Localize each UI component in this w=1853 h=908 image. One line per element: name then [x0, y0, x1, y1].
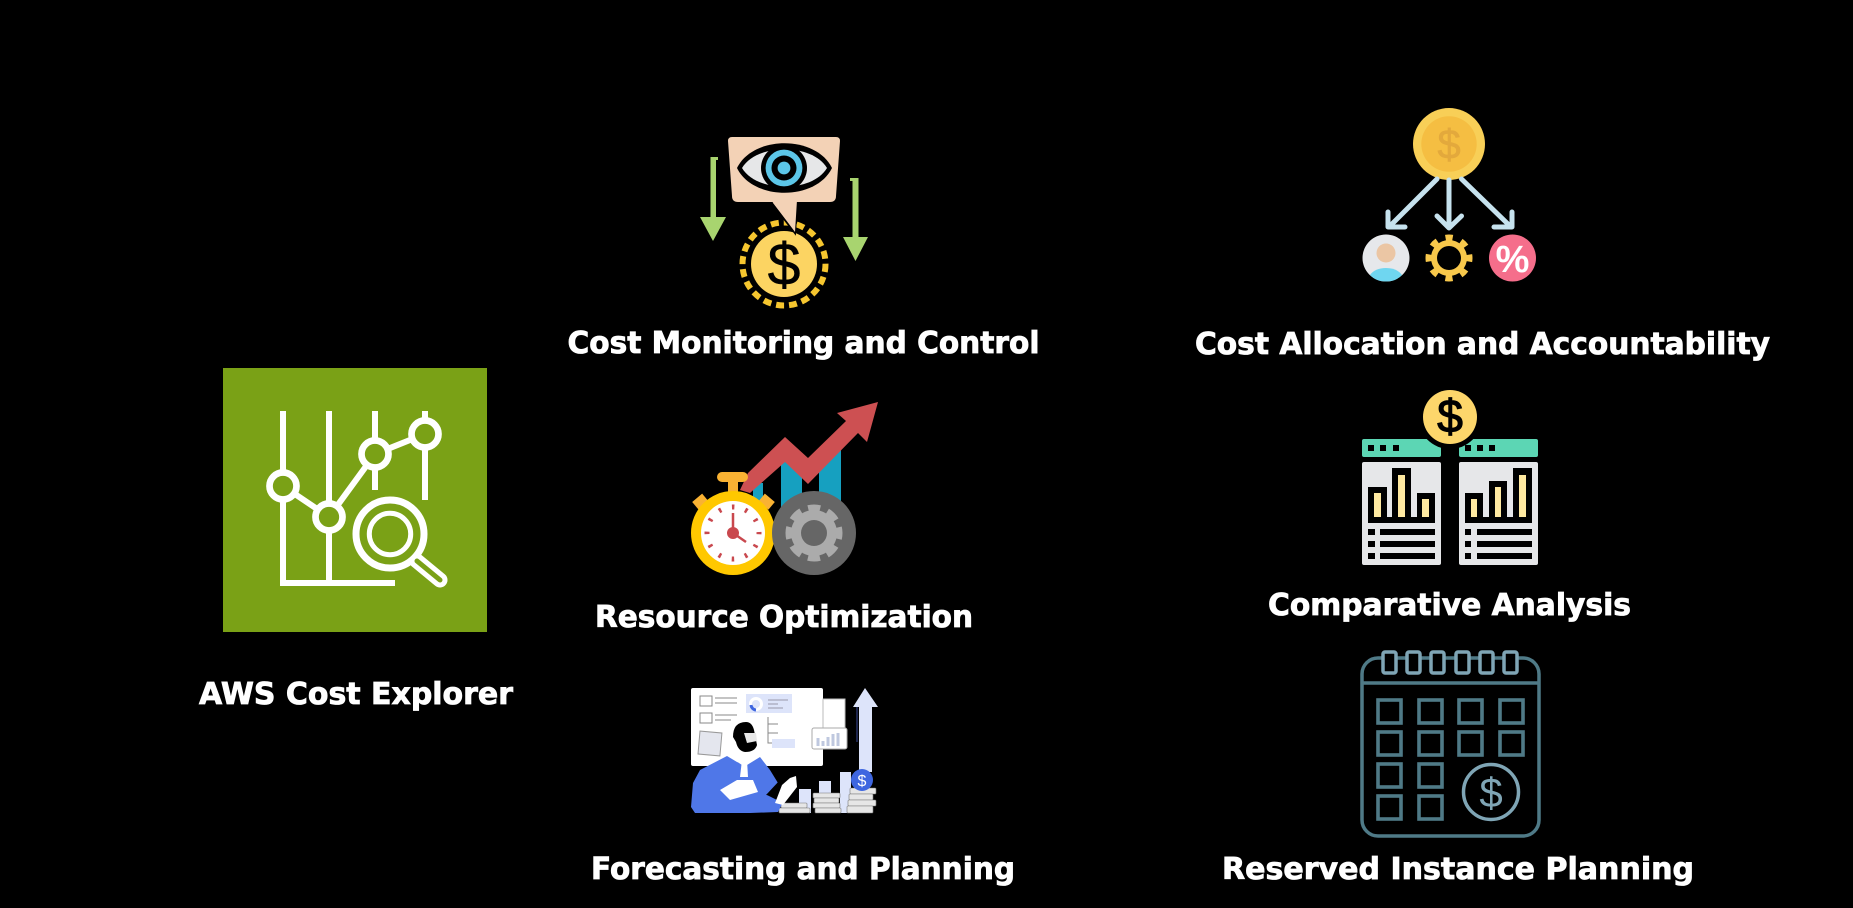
icon: coin splitting to person, gear, percent — [1362, 108, 1536, 282]
heading: Resource Optimization: Resource Optimization — [595, 600, 973, 635]
panel: Resource Optimization — [595, 402, 973, 635]
panel: Comparative Analysis — [1268, 385, 1631, 623]
panel: Forecasting and Planning — [591, 688, 1015, 887]
icon: two report windows with coin: $ — [1437, 390, 1463, 442]
panel: Reserved Instance Planning — [1222, 652, 1694, 887]
icon: stopwatch, gear and rising arrow — [691, 402, 878, 575]
panel: Cost Monitoring and Control — [568, 137, 1040, 361]
icon: analyst with board, coins and arrow: $ — [858, 773, 867, 790]
heading: Comparative Analysis: Comparative Analysis — [1268, 588, 1631, 623]
heading: AWS Cost Explorer: AWS Cost Explorer — [199, 677, 513, 712]
panel: Cost Allocation and Accountability — [1195, 108, 1770, 362]
icon: eye over dollar coin: $ — [768, 232, 800, 298]
heading: Reserved Instance Planning: Reserved Instance Planning — [1222, 852, 1694, 887]
icon: two report windows with coin — [1362, 385, 1538, 565]
icon: eye over dollar coin — [700, 137, 868, 306]
heading: Cost Allocation and Accountability: Cost Allocation and Accountability — [1195, 327, 1770, 362]
icon: calendar with dollar — [1362, 652, 1539, 836]
icon: AWS Cost Explorer logo — [223, 368, 487, 632]
heading: Cost Monitoring and Control: Cost Monitoring and Control — [568, 326, 1040, 361]
icon: calendar with dollar: $ — [1479, 769, 1503, 816]
icon: coin splitting to person, gear, percent: $ — [1437, 120, 1461, 168]
panel: AWS Cost Explorer — [199, 368, 513, 712]
icon: coin splitting to person, gear, percent: % — [1496, 239, 1529, 281]
heading: Forecasting and Planning: Forecasting and Planning — [591, 852, 1015, 887]
icon: analyst with board, coins and arrow — [691, 688, 878, 813]
